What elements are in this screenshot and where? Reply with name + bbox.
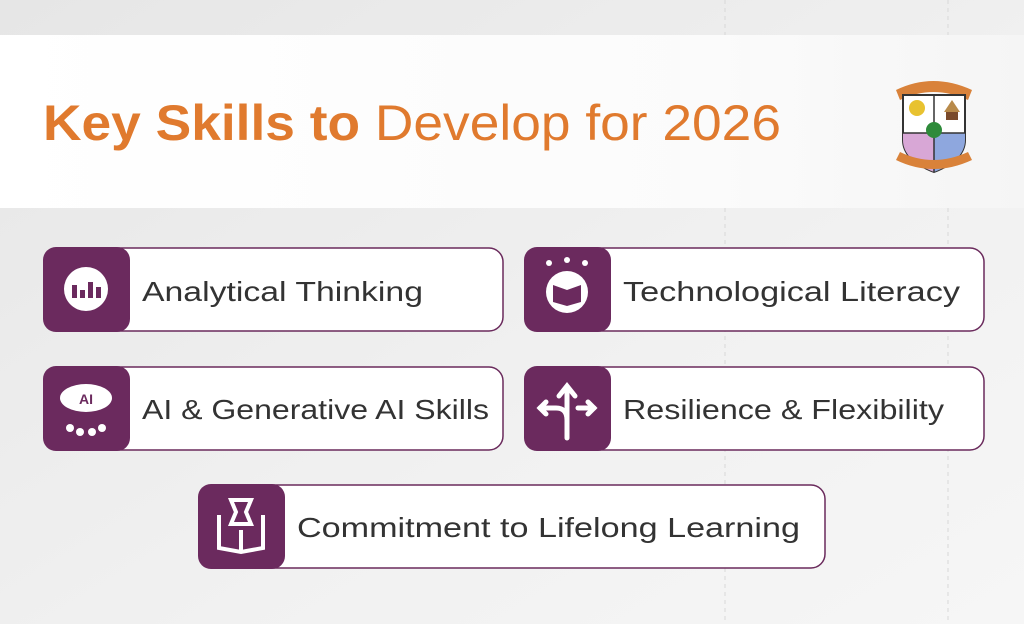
card: Technological Literacy (524, 247, 984, 332)
icon: gear book (546, 257, 588, 313)
card: Analytical Thinking (43, 247, 503, 332)
icon: split arrows (540, 386, 594, 438)
card: Commitment to Lifelong Learning (198, 484, 825, 569)
icon: brain chart (64, 267, 108, 311)
icon: hourglass book (219, 500, 263, 552)
card: Analytical Thinking: Analytical Thinking (142, 276, 423, 307)
card: Resilience & Flexibility (524, 366, 984, 451)
title: Key Skills to Develop for 2026 (43, 95, 781, 151)
card: Technological Literacy: Technological Literacy (623, 276, 960, 307)
card: Commitment to Lifelong Learning: Commitment to Lifelong Learning (297, 512, 800, 543)
icon: AI cloud (60, 384, 112, 436)
card: Resilience & Flexibility: Resilience & Flexibility (623, 394, 944, 425)
icon: AI cloud: AI (79, 391, 93, 407)
header band (0, 35, 1024, 208)
logo: university crest (896, 81, 972, 172)
card: AI & Generative AI Skills (43, 366, 503, 451)
card: AI & Generative AI Skills: AI & Generative AI Skills (142, 394, 489, 425)
